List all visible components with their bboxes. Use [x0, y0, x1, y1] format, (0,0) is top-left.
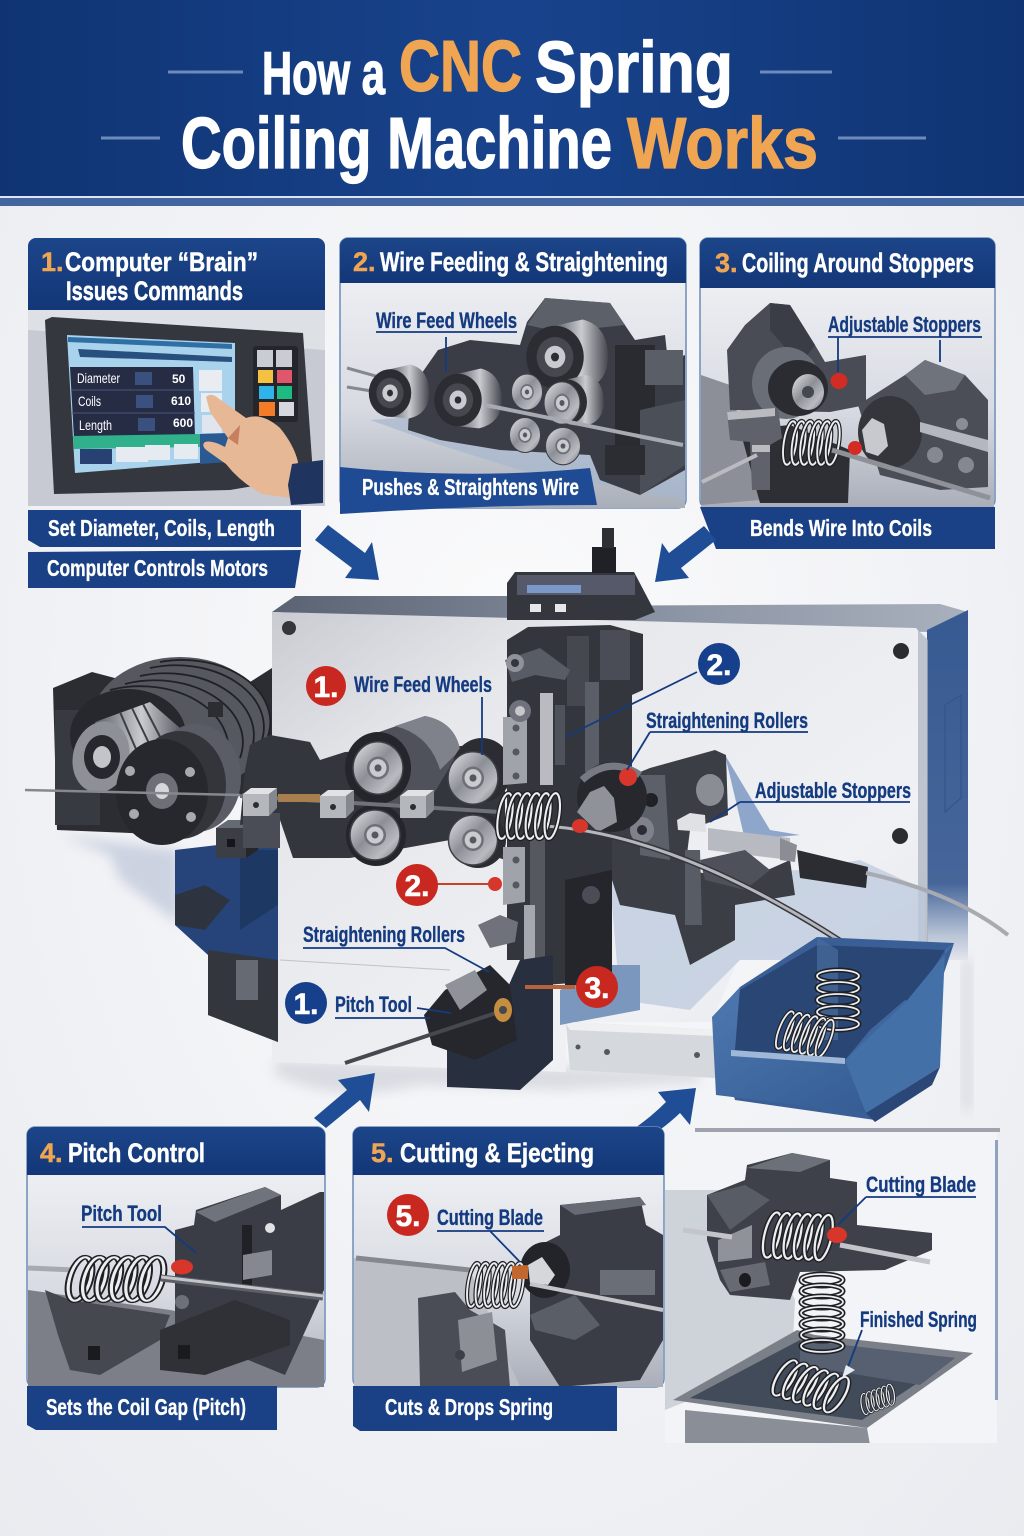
- badge: blue 2: 2.: [706, 649, 732, 682]
- soft shadows: [60, 835, 972, 1110]
- left motor assembly: [53, 657, 278, 1042]
- panel 2: wire feeding: [340, 238, 686, 508]
- panel 5 heading: Cutting & Ejecting: [400, 1138, 594, 1168]
- panel 4 heading: 4.: [40, 1138, 63, 1168]
- badge: red 2: [396, 864, 438, 906]
- caption: sets coil gap: Sets the Coil Gap (Pitch): [46, 1394, 246, 1420]
- feed rollers: [345, 716, 512, 868]
- lower mount: [727, 408, 850, 503]
- label: wire feed wheels: Wire Feed Wheels: [354, 672, 492, 697]
- central machine: [25, 528, 1008, 1122]
- badge: red 5: 5.: [395, 1200, 421, 1233]
- title: CNC: [399, 27, 522, 107]
- title: How a: [262, 40, 385, 107]
- caption: pushes and straightens: [340, 467, 597, 514]
- panel 3 heading: 3.: [715, 248, 738, 278]
- screen field labels: Coils: [78, 393, 101, 409]
- badge: red 3: [576, 966, 618, 1008]
- panel 1 heading: Issues Commands: [66, 276, 243, 306]
- lower mount: [418, 1292, 510, 1387]
- falling spring: [801, 1274, 843, 1352]
- caption: bends wire: Bends Wire Into Coils: [750, 515, 932, 541]
- panel 1 heading: Computer “Brain”: [65, 247, 258, 277]
- title: Coiling Machine: [181, 104, 612, 184]
- machine body: [408, 298, 685, 495]
- label: cutting blade: Cutting Blade: [437, 1205, 543, 1230]
- right stopper block: [858, 360, 988, 490]
- arrow: ejecting to bin: [632, 1088, 696, 1142]
- title: [181, 27, 818, 184]
- panel 1 heading: 1.: [41, 247, 64, 277]
- caption: computer controls motors: [28, 550, 301, 588]
- right stopper section: [577, 750, 868, 965]
- label: wire feed wheels: Wire Feed Wheels: [376, 308, 517, 333]
- small grooved roller: [65, 702, 188, 799]
- horizontal feed section: [240, 716, 512, 868]
- badge: red 3: 3.: [584, 972, 610, 1005]
- panel 1 touchscreen illustration: [28, 310, 325, 506]
- caption: bends wire: [700, 507, 995, 549]
- caption: cuts and drops: Cuts & Drops Spring: [385, 1394, 553, 1420]
- cutter machine: [707, 1153, 932, 1300]
- lower mount: [45, 1290, 290, 1375]
- top control box: [507, 528, 655, 620]
- wheel stack: [70, 657, 270, 793]
- collection tray: [673, 1330, 973, 1445]
- panel 2 heading: 2.: [353, 247, 376, 277]
- label: pitch tool: Pitch Tool: [335, 992, 412, 1017]
- caption: cuts and drops: [353, 1386, 617, 1431]
- machine back plate: [272, 596, 968, 1072]
- badge: red 5: [387, 1194, 429, 1236]
- panel 1 heading: [41, 247, 258, 306]
- arrow: panel 3 to machine: [655, 526, 716, 582]
- panel 3: coiling around stoppers: [700, 238, 995, 508]
- tool column: [175, 1187, 324, 1375]
- side button panel: [253, 346, 298, 422]
- caption: computer controls motors: Computer Controls Motors: [47, 555, 268, 581]
- screen field labels: 600: [173, 416, 193, 430]
- red marker points: [488, 768, 637, 891]
- label: cutting blade: Cutting Blade: [866, 1172, 976, 1197]
- screen field labels: 610: [171, 394, 191, 408]
- panel 4 illustration: [28, 1175, 324, 1387]
- badge: red 2: 2.: [404, 870, 430, 903]
- caption: pushes and straightens: Pushes & Straightens Wire: [362, 474, 579, 500]
- panel 5 illustration: [354, 1175, 663, 1387]
- badge: blue 1: 1.: [293, 988, 319, 1021]
- panel 4: pitch control: [27, 1127, 325, 1387]
- label: adjustable stoppers: Adjustable Stoppers: [755, 778, 911, 803]
- panel 1: computer brain: [28, 238, 325, 506]
- caption: sets coil gap: [27, 1386, 277, 1430]
- panel 4 heading: Pitch Control: [68, 1138, 205, 1168]
- screen field labels: Length: [79, 417, 112, 433]
- caption: set diameter: [28, 510, 301, 547]
- lower blue body: [175, 838, 278, 1042]
- cutting head: [520, 1197, 663, 1387]
- panel 3 coiling illustration: [701, 288, 994, 508]
- arrow: pitch control to machine: [314, 1073, 375, 1128]
- wire guides: [243, 788, 434, 818]
- label: finished spring: Finished Spring: [860, 1307, 977, 1332]
- title: Works: [627, 104, 818, 184]
- vertical column: [478, 625, 643, 997]
- bluish shadows on plate: [280, 755, 925, 1025]
- panel 5: cutting and ejecting: [353, 1127, 664, 1387]
- panel 2 heading: Wire Feeding & Straightening: [380, 247, 668, 277]
- bin with springs: [712, 937, 954, 1122]
- screen field labels: [77, 370, 193, 433]
- caption: set diameter: Set Diameter, Coils, Length: [48, 515, 275, 541]
- left stopper block: [727, 303, 866, 419]
- badge: blue 1: [285, 982, 327, 1024]
- screen field labels: 50: [172, 372, 186, 386]
- label: pitch tool: Pitch Tool: [81, 1201, 162, 1226]
- label: straightening rollers left: Straightening Rollers: [303, 922, 465, 947]
- callout lines: [303, 672, 910, 1018]
- panel 5 heading: 5.: [371, 1138, 394, 1168]
- badge: blue 2: [698, 643, 740, 685]
- screen field labels: Diameter: [77, 370, 120, 386]
- panel 4 heading: [40, 1138, 205, 1168]
- badge: red 1 wire feed wheels: [306, 666, 346, 706]
- hand: [203, 395, 298, 498]
- panel: finished spring illustration: [665, 1128, 1000, 1445]
- label: straightening rollers right: Straightening Rollers: [646, 708, 808, 733]
- badge: red 1 wire feed wheels: 1.: [313, 671, 339, 704]
- central spring: [494, 792, 563, 840]
- silver lower bracket: [566, 1022, 716, 1078]
- header banner: [0, 0, 1024, 206]
- panel 2 rollers illustration: [341, 283, 685, 508]
- pitch tool assembly: [345, 955, 575, 1090]
- arrow: panel 1 to machine: [315, 525, 379, 580]
- large black wheel: [116, 724, 241, 845]
- wires: [25, 790, 1008, 982]
- title: Spring: [535, 28, 733, 108]
